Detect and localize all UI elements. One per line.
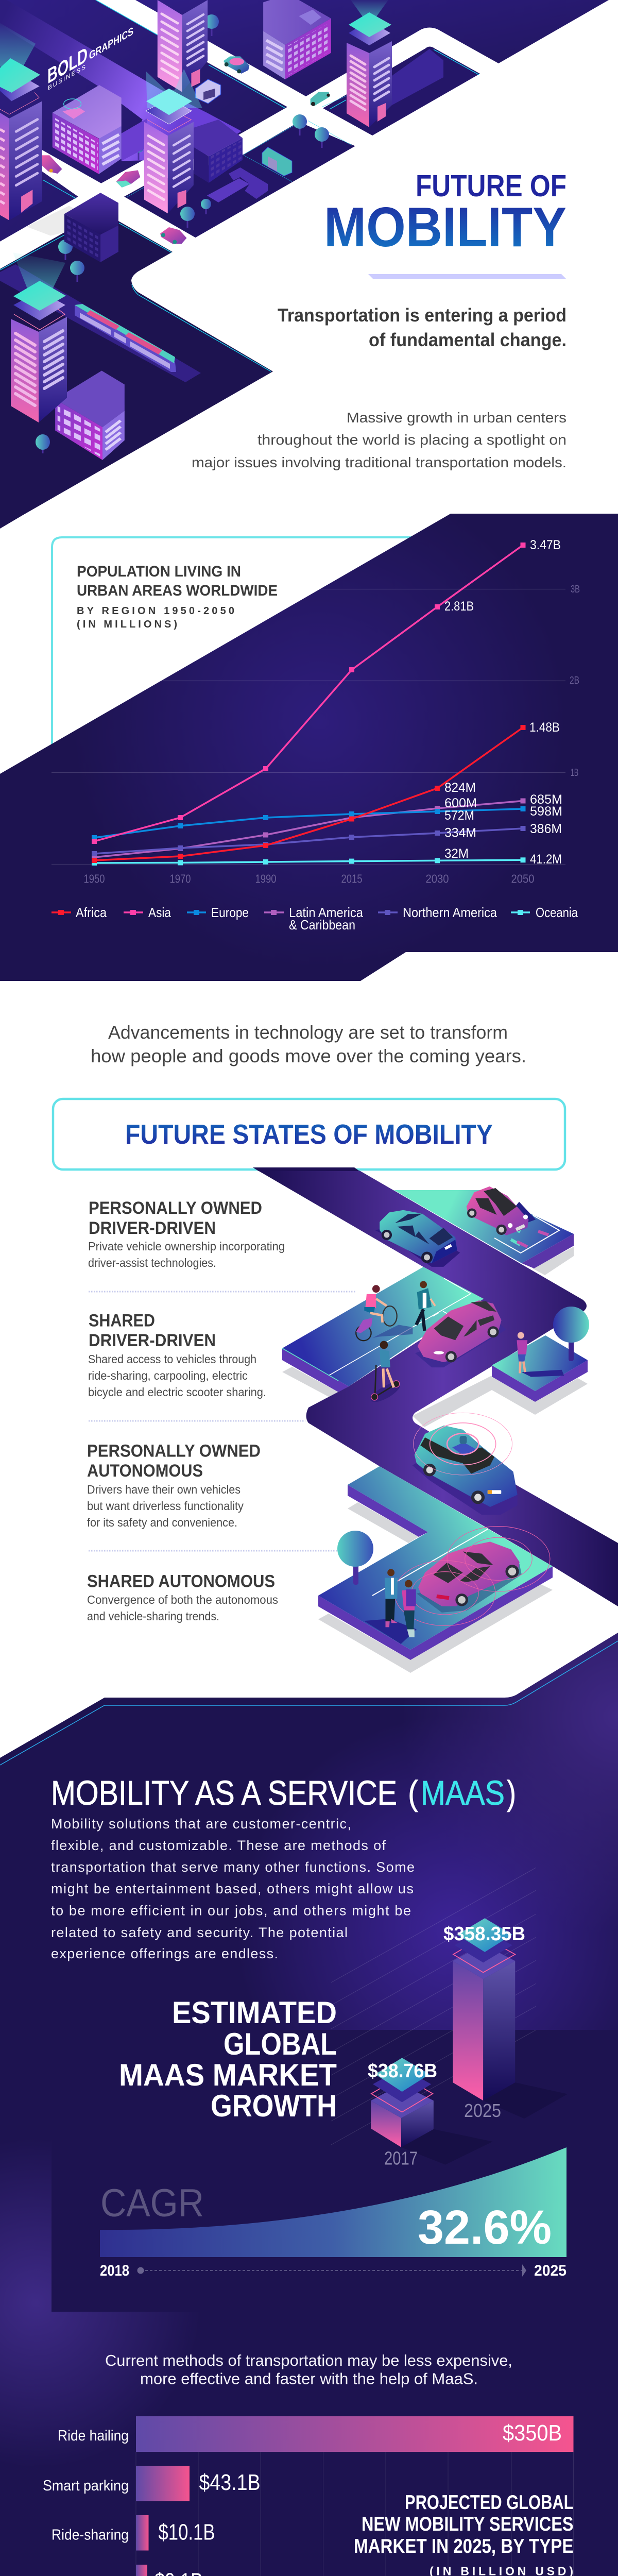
state: shared driver-driven: ride-sharing, carpooling, electric — [88, 1369, 248, 1382]
series: Oceania — [92, 857, 525, 866]
market growth title — [119, 1995, 337, 2123]
chart heading: URBAN AREAS WORLDWIDE — [77, 582, 278, 599]
tower: far left — [0, 23, 42, 221]
state: shared autonomous: Convergence of both the autonomous — [87, 1593, 278, 1606]
legend: & Caribbean — [289, 917, 355, 933]
background glows — [0, 1633, 618, 2473]
chart heading: POPULATION LIVING IN — [77, 563, 241, 580]
trees — [36, 14, 329, 453]
data labels: 685M — [530, 792, 562, 807]
office building: bottom — [55, 370, 125, 460]
state: personally owned autonomous: but want driverless functionality — [87, 1499, 244, 1513]
series: Asia — [92, 543, 525, 844]
series: Africa — [92, 725, 525, 863]
definition paragraph: to be more efficient in our jobs, and others might be — [51, 1903, 411, 1919]
section background — [0, 1633, 618, 2576]
state: personally owned driver-driven — [88, 1198, 285, 1269]
car: magenta sedan — [415, 1300, 506, 1367]
state: personally owned autonomous: Drivers have their own vehicles — [87, 1483, 241, 1496]
left column: mobility state descriptions — [87, 1198, 355, 1623]
city block: central — [124, 122, 355, 238]
CAGR area chart: 32.6% — [418, 2200, 552, 2254]
horizontal bar chart: Ride-sharing — [52, 2527, 129, 2543]
small cars and buses — [42, 56, 330, 244]
person: scooter rider — [368, 1341, 403, 1405]
hero city illustration — [0, 0, 609, 529]
intro text — [192, 410, 566, 470]
CAGR area chart — [100, 2147, 566, 2279]
office building: top right — [263, 0, 331, 79]
long low building — [392, 49, 443, 105]
section heading: MOBILITY AS A SERVICE — [51, 1774, 397, 1812]
tower: centre with glow — [144, 69, 202, 213]
section heading: MAAS — [421, 1774, 505, 1812]
people shaking hands — [364, 1569, 417, 1644]
state: personally owned autonomous: PERSONALLY OWNED — [87, 1442, 261, 1461]
CAGR area chart: CAGR — [100, 2181, 204, 2225]
office building: central dark — [194, 120, 268, 202]
legend: Oceania — [536, 905, 578, 920]
bar chart title: MARKET IN 2025, BY TYPE — [354, 2535, 574, 2557]
state: personally owned driver-driven: DRIVER-DRIVEN — [89, 1218, 216, 1238]
x axis years: 2030 — [425, 872, 449, 885]
intro text: Massive growth in urban centers — [347, 410, 566, 426]
panel: urban population chart — [0, 514, 618, 981]
panel: mobility as a service — [0, 1633, 618, 2576]
data labels: 3.47B — [530, 538, 561, 552]
diagonal decor lines — [331, 1868, 536, 2145]
transition text — [91, 1022, 526, 1066]
x axis years: 1990 — [255, 872, 276, 885]
bar chart title: PROJECTED GLOBAL — [405, 2492, 574, 2514]
market growth title: MAAS MARKET — [119, 2058, 337, 2092]
bar chart title — [354, 2492, 574, 2576]
x axis years: 1970 — [170, 872, 191, 885]
city block: right — [323, 46, 480, 135]
heading box: future states of mobility: FUTURE STATES OF MOBILITY — [125, 1119, 493, 1150]
bar chart title: NEW MOBILITY SERVICES — [362, 2513, 574, 2535]
state: shared autonomous: SHARED AUTONOMOUS — [87, 1571, 275, 1591]
data labels: 824M — [444, 781, 476, 795]
market growth title: GLOBAL — [224, 2027, 337, 2061]
chart heading — [77, 563, 278, 630]
legend: Latin America — [289, 905, 363, 920]
legend: Northern America — [403, 905, 497, 920]
data labels: 600M — [444, 796, 477, 810]
state: shared driver-driven — [88, 1311, 266, 1399]
bar values and years: $358.35B — [443, 1923, 525, 1945]
chart heading: BY REGION 1950-2050 — [77, 605, 234, 617]
legend: Africa — [76, 905, 107, 920]
state: personally owned autonomous: for its safety and convenience. — [87, 1516, 237, 1529]
platform shadows — [282, 1247, 588, 1673]
city block: upper left — [0, 0, 287, 242]
definition paragraph: flexible, and customizable. These are methods of — [51, 1838, 386, 1853]
title: Future of Mobility: FUTURE OF — [416, 169, 566, 203]
state: personally owned driver-driven: driver-assist technologies. — [88, 1256, 216, 1269]
data labels: 598M — [530, 804, 562, 819]
definition paragraph: experience offerings are endless. — [51, 1946, 278, 1961]
tree: upper — [553, 1307, 589, 1361]
platform 1 vehicle bay — [394, 1190, 574, 1268]
road illustration — [254, 1168, 618, 1673]
MaaS benefit text: more effective and faster with the help of MaaS. — [140, 2370, 478, 2387]
definition paragraph — [51, 1816, 415, 1961]
horizontal bar chart: $350B — [503, 2420, 562, 2446]
state: personally owned autonomous — [87, 1442, 261, 1529]
car: autonomous van with sensor rings — [413, 1413, 518, 1515]
x axis years: 2015 — [341, 872, 363, 885]
data labels: 41.2M — [530, 852, 562, 867]
tree: lower — [337, 1531, 373, 1585]
platform 2 — [282, 1267, 484, 1392]
horizontal bar chart: Smart parking — [43, 2478, 129, 2494]
section heading: ) — [507, 1774, 516, 1812]
y axis grid and labels: 3B — [571, 584, 580, 595]
x axis years — [83, 872, 535, 885]
bar 2017 — [371, 2058, 493, 2165]
tower: right — [347, 0, 392, 127]
office building: helipad — [53, 85, 147, 174]
city block: top right — [135, 0, 609, 96]
y axis grid and labels — [52, 584, 580, 865]
road shadow — [26, 206, 78, 236]
legend: Europe — [211, 905, 249, 920]
person: standing woman — [517, 1332, 564, 1377]
state: shared autonomous — [87, 1571, 278, 1623]
logo: Bold Business Graphics: BUSINESS — [48, 63, 85, 92]
tram — [75, 304, 176, 372]
heading box: future states of mobility — [53, 1099, 565, 1170]
state: shared driver-driven: bicycle and electric scooter sharing. — [88, 1385, 266, 1399]
definition paragraph: related to safety and security. The potential — [51, 1925, 348, 1940]
person: man on phone — [416, 1281, 435, 1331]
isometric bar chart — [368, 1918, 568, 2169]
car: magenta sports with rings — [394, 1527, 550, 1626]
title: Future of Mobility — [324, 169, 566, 279]
road edge lines — [0, 0, 479, 371]
transition text: Advancements in technology are set to transform — [108, 1022, 508, 1043]
state: shared autonomous: and vehicle-sharing trends. — [87, 1609, 219, 1623]
MaaS benefit text — [105, 2351, 512, 2387]
legend — [52, 905, 578, 933]
glowing road band — [0, 0, 242, 161]
definition paragraph: Mobility solutions that are customer-centric, — [51, 1816, 351, 1832]
tower: lower left — [11, 252, 67, 422]
state: shared driver-driven: Shared access to vehicles through — [88, 1352, 256, 1366]
intro text: major issues involving traditional transportation models. — [192, 454, 566, 470]
CAGR area chart: 2018 — [100, 2262, 129, 2279]
state: shared driver-driven: SHARED — [89, 1311, 155, 1330]
series: Northern America — [92, 826, 525, 856]
person: cyclist — [356, 1285, 413, 1341]
tram track — [0, 264, 201, 382]
logo: Bold Business Graphics: GRAPHICS — [89, 24, 133, 62]
main purple road — [254, 1168, 618, 1606]
data labels: 334M — [444, 825, 476, 840]
legend: Asia — [148, 905, 171, 920]
state: personally owned driver-driven: Private vehicle ownership incorporating — [88, 1240, 285, 1253]
horizontal bar chart — [43, 2416, 574, 2576]
market growth title: ESTIMATED — [172, 1995, 337, 2030]
car: pink compact — [467, 1187, 536, 1235]
x axis years: 2050 — [511, 872, 535, 885]
car: blue hatchback — [375, 1210, 460, 1267]
horizontal bar chart: Ride hailing — [58, 2428, 129, 2444]
section heading: ( — [408, 1774, 418, 1812]
road entering under box — [253, 1167, 359, 1171]
state: personally owned driver-driven: PERSONALLY OWNED — [89, 1198, 262, 1218]
logo: Bold Business Graphics — [47, 16, 133, 92]
bar values and years: $38.76B — [368, 2060, 437, 2082]
series: Europe — [92, 806, 525, 840]
bar values and years: 2017 — [384, 2147, 418, 2169]
data labels: 32M — [444, 846, 469, 861]
market growth title: GROWTH — [211, 2089, 337, 2123]
y axis grid and labels: 1B — [571, 767, 578, 778]
bar values and years: 2025 — [464, 2100, 501, 2121]
definition paragraph: transportation that serve many other functions. Some — [51, 1859, 415, 1875]
data labels: 386M — [530, 822, 562, 836]
state: shared driver-driven: DRIVER-DRIVEN — [89, 1331, 216, 1350]
intro text: throughout the world is placing a spotlight on — [258, 432, 566, 448]
data labels: 2.81B — [444, 599, 474, 614]
data labels: 572M — [444, 808, 474, 823]
CAGR area chart: 2025 — [534, 2262, 566, 2279]
subtitle text: of fundamental change. — [369, 329, 566, 350]
definition paragraph: might be entertainment based, others might allow us — [51, 1881, 414, 1896]
subtitle text — [278, 304, 566, 350]
office building: lower dark — [64, 193, 118, 262]
city block: lower left — [0, 214, 273, 529]
panel border — [52, 537, 417, 752]
inner darker panel — [52, 2030, 618, 2312]
bar values and years — [368, 1923, 525, 2169]
data labels: 1.48B — [529, 720, 560, 735]
series: Latin America and Caribbean — [92, 799, 525, 860]
chart dark background — [0, 514, 618, 981]
y axis grid and labels: 2B — [570, 675, 579, 686]
tower: top centre — [158, 0, 208, 92]
horizontal bar chart: $43.1B — [199, 2470, 261, 2495]
transition text: how people and goods move over the coming years. — [91, 1045, 526, 1066]
data labels — [444, 538, 562, 867]
horizontal bar chart: $10.1B — [159, 2519, 215, 2545]
title: Future of Mobility: MOBILITY — [324, 196, 566, 259]
bar 2025 — [453, 1918, 568, 2119]
x axis years: 1950 — [83, 872, 105, 885]
platform 2 sidewalk — [492, 1335, 588, 1402]
MaaS benefit text: Current methods of transportation may be less expensive, — [105, 2351, 512, 2369]
subtitle text: Transportation is entering a period — [278, 304, 566, 326]
platform 3 — [318, 1466, 553, 1660]
logo: Bold Business Graphics: BOLD — [47, 43, 88, 89]
state: personally owned autonomous: AUTONOMOUS — [87, 1461, 203, 1481]
chart heading: (IN MILLIONS) — [77, 619, 177, 630]
